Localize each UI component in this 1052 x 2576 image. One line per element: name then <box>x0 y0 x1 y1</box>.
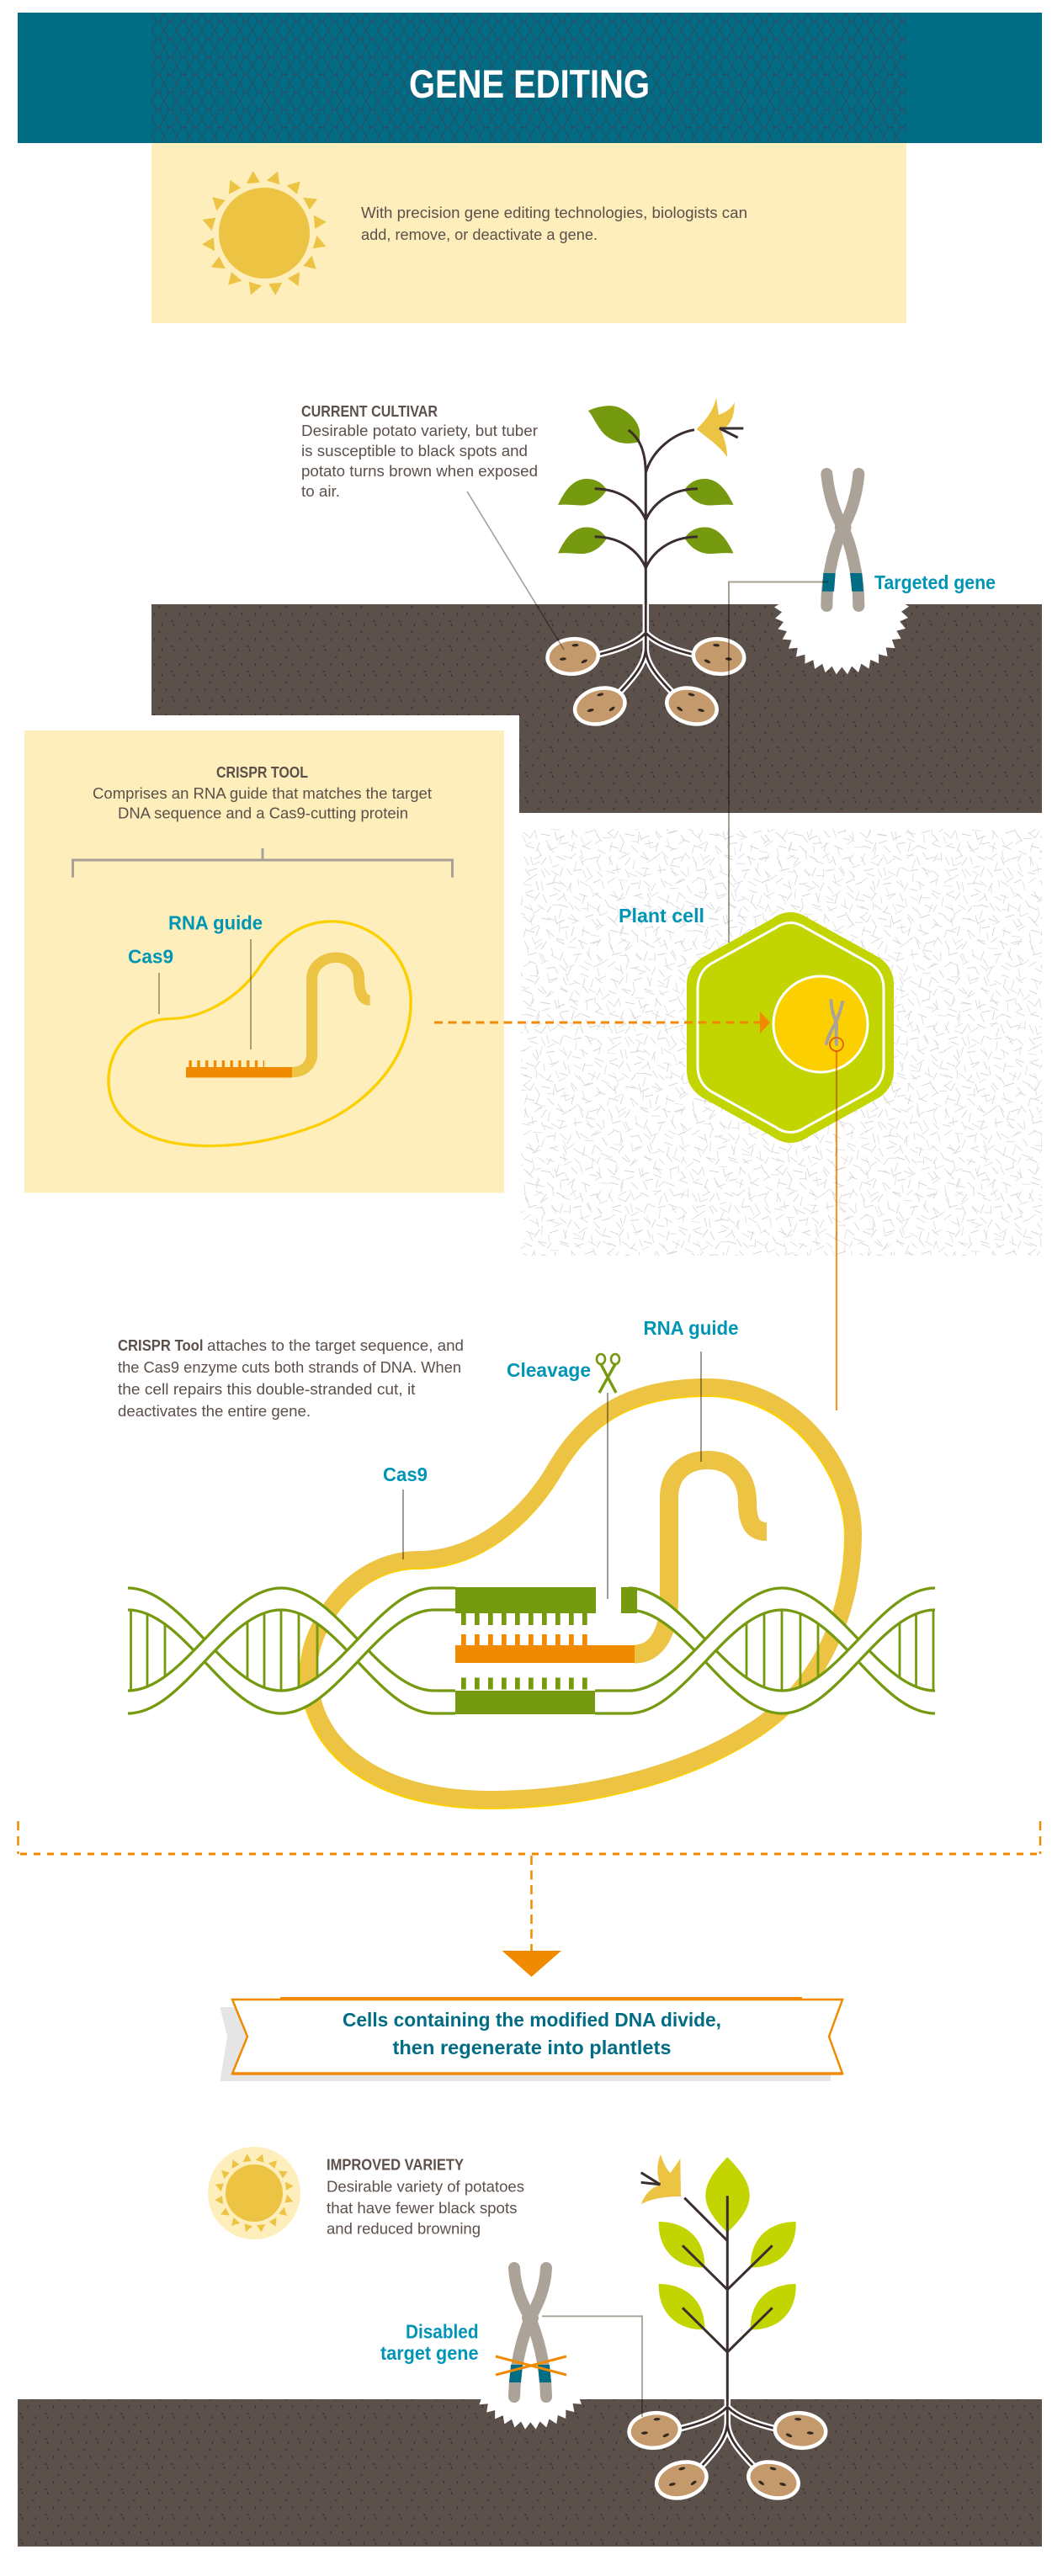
chromosome: targeted gene <box>822 474 863 606</box>
text: improved variety: IMPROVED VARIETY <box>327 2156 465 2173</box>
heading and description: DNA sequence and a Cas9-cutting protein <box>118 805 408 821</box>
panel: plant cell background <box>521 829 1042 1256</box>
diagram: CRISPR on DNA <box>128 1387 935 1801</box>
stems <box>595 428 743 604</box>
heading and description <box>93 763 432 821</box>
heading and description: CRISPR TOOL <box>216 763 308 781</box>
bracket <box>72 848 453 877</box>
text: current cultivar: potato turns brown when exposed <box>301 462 538 480</box>
text: improved variety: Desirable variety of potatoes <box>327 2178 524 2195</box>
DNA strands <box>128 1588 935 1713</box>
RNA guide bar <box>455 1639 635 1663</box>
banner text: then regenerate into plantlets <box>392 2037 672 2058</box>
label: Cas9: Cas9 <box>128 946 173 968</box>
flower <box>697 397 735 457</box>
arrowhead <box>502 1951 561 1977</box>
label: Cleavage: Cleavage <box>507 1359 591 1381</box>
soil: lower <box>18 2399 1042 2547</box>
DNA cut blocks <box>455 1587 637 1714</box>
text: improved variety <box>327 2156 524 2237</box>
dashed sides <box>19 1821 1040 1854</box>
Cas9 protein <box>308 1387 853 1801</box>
label: Cas9: Cas9 <box>383 1463 428 1485</box>
target ring <box>830 1038 843 1051</box>
text: current cultivar: is susceptible to black spots and <box>301 442 528 459</box>
small chromosome <box>826 1001 842 1044</box>
stems <box>641 2173 773 2399</box>
leader: disabled gene to tuber <box>542 2316 642 2417</box>
text: CRISPR tool action: CRISPR Tool <box>118 1336 204 1354</box>
roots and tubers <box>625 2399 829 2506</box>
leader: target to CRISPR action <box>836 1051 837 1410</box>
text: CRISPR tool action: the Cas9 enzyme cuts both strands of DNA. When <box>118 1358 461 1376</box>
label: disabled target gene <box>380 2321 478 2364</box>
soil: upper <box>151 604 1042 813</box>
nucleus <box>773 976 868 1072</box>
rungs <box>131 1610 933 1691</box>
title banner <box>18 13 1042 143</box>
plant: current cultivar <box>544 397 747 732</box>
leader: cultivar to potato <box>467 491 564 650</box>
label: targeted gene: Targeted gene <box>874 571 996 593</box>
label: RNA guide: RNA guide <box>643 1317 739 1339</box>
leader: gene to plant cell <box>729 582 828 943</box>
text: current cultivar <box>301 402 538 500</box>
leaders <box>159 939 251 1049</box>
text: current cultivar: CURRENT CULTIVAR <box>301 402 438 420</box>
banner text <box>343 2009 721 2058</box>
banner text: Cells containing the modified DNA divide, <box>343 2009 721 2031</box>
RNA tail <box>635 1460 767 1654</box>
leaves <box>558 406 734 554</box>
plant cell <box>687 912 894 1143</box>
text: CRISPR tool action: deactivates the entire gene. <box>118 1402 311 1420</box>
icon: sun <box>201 170 327 296</box>
text: current cultivar: Desirable potato variety, but tuber <box>301 422 538 439</box>
RNA guide bar <box>186 1064 292 1077</box>
text: improved variety: and reduced browning <box>327 2220 481 2237</box>
leaders <box>403 1352 701 1599</box>
plant: improved variety <box>625 2154 829 2506</box>
roots and tubers <box>544 604 747 732</box>
banner shadow <box>220 2007 831 2081</box>
text: CRISPR tool action <box>118 1336 464 1420</box>
text: current cultivar: to air. <box>301 482 340 500</box>
intro text <box>361 204 747 243</box>
flower <box>641 2154 681 2204</box>
banner <box>232 1997 842 2074</box>
dashed collector <box>20 1853 1039 1855</box>
saw cut-out: lower <box>465 2308 595 2430</box>
label: RNA guide: RNA guide <box>168 912 263 934</box>
icon: small sun badge <box>208 2147 300 2239</box>
panel: CRISPR tool <box>24 730 504 1193</box>
intro text: add, remove, or deactivate a gene. <box>361 226 598 243</box>
label: disabled target gene: Disabled <box>406 2321 478 2343</box>
text: CRISPR tool action: the cell repairs this double-stranded cut, it <box>118 1380 416 1398</box>
arrow: CRISPR tool into nucleus <box>434 1012 770 1033</box>
saw cut-out: upper <box>774 547 909 675</box>
icon: scissors <box>597 1354 619 1393</box>
orange cross <box>496 2356 566 2375</box>
text: improved variety: that have fewer black spots <box>327 2199 517 2217</box>
chromosome: disabled gene <box>496 2268 566 2397</box>
title: GENE EDITING <box>409 61 650 106</box>
intro text: With precision gene editing technologies, biologists can <box>361 204 747 221</box>
label: disabled target gene: target gene <box>380 2342 478 2364</box>
heading and description: Comprises an RNA guide that matches the target <box>93 784 432 802</box>
dashed connector <box>530 1856 533 1951</box>
leaves <box>659 2157 796 2329</box>
panel: introduction <box>151 143 906 323</box>
text: CRISPR tool action: attaches to the target sequence, and <box>207 1336 464 1354</box>
label: plant cell: Plant cell <box>619 905 704 927</box>
Cas9 outline <box>109 922 411 1146</box>
